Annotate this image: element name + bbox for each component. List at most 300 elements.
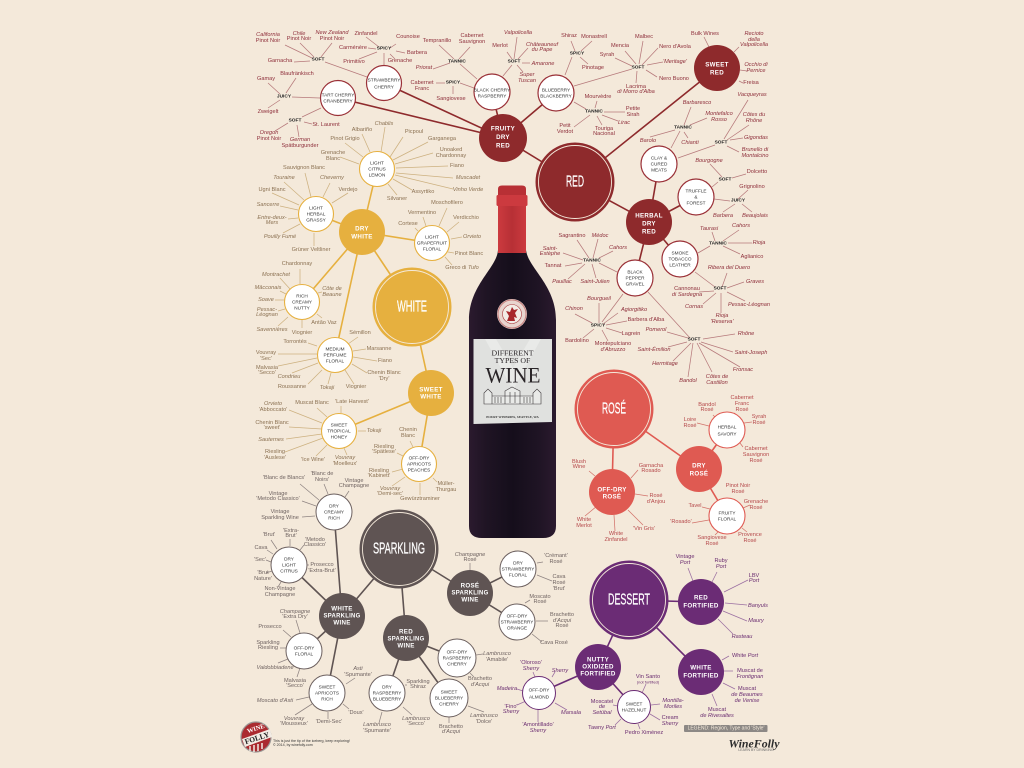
connectors: white variety leaf lines	[272, 127, 462, 495]
variety labels: rosé: Pinot Noir	[726, 483, 750, 489]
hub: fruity dry red	[479, 114, 527, 162]
taste keywords: red: SPICY	[446, 80, 461, 86]
style: dry creamy rich: RICH	[328, 516, 340, 520]
variety labels: dessert: Moscatel	[591, 699, 613, 705]
variety labels: white sparkling: Moscato d'Asti	[257, 698, 294, 704]
panel: dessert wines	[497, 554, 768, 736]
style: sweet tropical honey: HONEY	[331, 434, 348, 440]
style: light citrus lemon: CITRUS	[368, 166, 386, 172]
style: rich creamy nutty: RICH	[296, 294, 308, 298]
hub: rosé sparkling wine: SPARKLING	[452, 590, 488, 596]
variety labels: fruity dry red: Barbera	[407, 50, 428, 56]
hub: fruity dry red: DRY	[496, 134, 510, 141]
style: sweet apricots rich: SWEET	[319, 684, 335, 690]
variety labels: sweet red: Recioto	[745, 31, 763, 37]
variety labels: herbal dry red: Graves	[746, 279, 764, 285]
variety labels: dry white: Côte de	[322, 286, 342, 292]
variety labels: fruity dry red: Lacrima	[626, 84, 647, 90]
variety labels: dry white: Mâcconais	[255, 285, 282, 291]
variety labels: white sparkling: Champagne	[280, 609, 310, 615]
variety labels: rosé: Rosé	[743, 538, 757, 544]
style: off-dry raspberry cherry	[438, 639, 476, 677]
variety labels: sweet white: Riesling	[369, 468, 389, 474]
variety labels: dry white: Touraine	[273, 175, 295, 181]
variety labels: fruity dry red: Chile	[293, 31, 305, 37]
variety labels: dry white: 'Sec'	[260, 356, 272, 362]
hub: rosé sparkling wine: ROSÉ	[461, 582, 479, 590]
taste keywords: red: JUICY	[277, 94, 292, 100]
variety labels: dessert: Setúbal	[593, 710, 612, 716]
style: tart cherry cranberry	[320, 80, 356, 116]
hub: nutty oxidized fortified: FORTIFIED	[580, 670, 616, 678]
variety labels: dry white: Pinot Grigio	[330, 136, 360, 142]
style: tart cherry cranberry: CRANBERRY	[323, 98, 354, 104]
variety labels: fruity dry red: Super	[520, 72, 536, 78]
variety labels: dry white: Condrieu	[278, 374, 300, 380]
variety labels: sweet white: Muscat Blanc	[295, 400, 329, 406]
variety labels: fruity dry red: 'Meritage'	[663, 59, 688, 65]
variety labels: dry white: Montrachet	[262, 272, 290, 278]
variety labels: herbal dry red: Barbera d'Alba	[628, 317, 665, 323]
bottle medallion	[497, 299, 527, 329]
variety labels: fruity dry red: Zweigelt	[258, 109, 279, 115]
variety labels: rosé sparkling: 'Crémant'	[544, 553, 568, 559]
variety labels: fruity dry red: Sauvignon	[459, 39, 485, 45]
variety labels: herbal dry red: Brunello di	[742, 147, 769, 153]
variety labels: herbal dry red: Grignolino	[739, 184, 765, 190]
hub: red sparkling wine	[383, 615, 429, 661]
hub: sweet red	[694, 45, 740, 91]
variety labels: rosé sparkling: Brachetto	[550, 612, 574, 618]
style: black pepper gravel	[617, 260, 653, 296]
connectors: rosé variety leaf lines	[585, 413, 752, 535]
variety labels: fruity dry red: Verdot	[557, 129, 574, 135]
variety labels: dry white: Verdicchio	[453, 215, 479, 221]
bottle label	[474, 339, 552, 424]
variety labels: sweet white	[255, 399, 456, 502]
variety labels: rosé: Rosé	[752, 420, 766, 426]
hub: white fortified: WHITE	[690, 664, 712, 672]
variety labels: dessert	[497, 554, 768, 736]
style: off-dry raspberry cherry: OFF-DRY	[447, 650, 468, 654]
style: blueberry blackberry	[538, 75, 574, 111]
variety labels: dessert: Tawny Port	[588, 725, 616, 731]
variety labels: dessert: de Beaumes	[731, 692, 763, 698]
hub: red sparkling wine: SPARKLING	[388, 636, 424, 642]
hub: white sparkling wine: WINE	[333, 620, 351, 626]
style: smoke tobacco leather: LEATHER	[669, 262, 691, 268]
variety labels: herbal dry red: Gigondas	[744, 135, 768, 141]
variety labels: herbal dry red: Côtes du	[743, 112, 765, 118]
variety labels: dry white: Savennières	[256, 327, 288, 333]
variety labels: herbal dry red: Taurasi	[700, 226, 719, 232]
variety labels: herbal dry red: Médoc	[592, 233, 609, 239]
style: light grapefruit floral: GRAPEFRUIT	[417, 240, 447, 246]
variety labels: herbal dry red: 'Reserva'	[711, 319, 734, 325]
hub: SPARKLING	[360, 510, 438, 588]
style: fruity floral: FLORAL	[718, 516, 737, 522]
label chateau drawing	[484, 387, 541, 404]
variety labels: herbal dry red: Chianti	[681, 140, 699, 146]
variety labels: white sparkling: Champagne	[339, 483, 369, 489]
variety labels: fruity dry red: Valpolicella	[504, 30, 532, 36]
hub: WHITE	[372, 268, 452, 346]
variety labels: fruity dry red: Counoise	[396, 34, 420, 40]
variety labels: dry white: Mers	[266, 220, 278, 226]
variety labels: dry white: Ugni Blanc	[258, 187, 286, 193]
variety labels: sweet red: Valpolicella	[740, 42, 768, 48]
style: off-dry strawberry orange: ORANGE	[507, 626, 527, 630]
hub: herbal dry red: RED	[642, 228, 656, 236]
variety labels: fruity dry red: St. Laurent	[312, 122, 340, 128]
variety labels: fruity dry red: Tuscan	[518, 78, 536, 84]
variety labels: dry white: Blanc	[326, 156, 340, 162]
variety labels: red sparkling: Lambrusco	[483, 651, 511, 657]
variety labels: rosé: Rosé	[749, 458, 763, 464]
hub: dry white: DRY	[355, 226, 369, 232]
variety labels: dry white: Viognier	[292, 330, 312, 336]
style: dry raspberry blueberry: BLUEBERRY	[373, 696, 402, 702]
variety labels: dessert: Ruby	[714, 558, 728, 564]
variety labels: dessert: Sherry	[552, 668, 569, 674]
variety labels: herbal dry red: Hermitage	[652, 361, 678, 367]
variety labels: white sparkling: 'Doux'	[348, 710, 364, 716]
style: sweet apricots rich: APRICOTS	[315, 690, 339, 696]
variety labels: rosé: Rosé	[731, 489, 745, 495]
variety labels: rosé: White	[609, 531, 623, 537]
hub: sweet white: SWEET	[419, 386, 443, 394]
variety labels: dry white: Muscadet	[456, 175, 481, 181]
hub: off-dry rosé: ROSÉ	[603, 492, 621, 500]
hub: sweet red: SWEET	[705, 62, 729, 68]
style: tart cherry cranberry: TART CHERRY	[322, 92, 355, 98]
hub: rosé sparkling wine: WINE	[461, 596, 479, 604]
variety labels: dry white: Antão Vaz	[311, 320, 337, 326]
variety labels: sweet white: 'Late Harvest'	[335, 399, 369, 405]
taste keywords: red: SPICY	[377, 46, 392, 52]
style: sweet blueberry cherry: SWEET	[441, 690, 457, 694]
style: light grapefruit floral	[414, 226, 450, 260]
variety labels: sweet white: Gewürztraminer	[400, 496, 440, 502]
variety labels: dessert: Frontignan	[737, 674, 763, 680]
style: dry light citrus	[271, 547, 307, 583]
panel: white wines	[255, 121, 483, 502]
style: light herbal grassy	[298, 196, 334, 232]
variety labels: herbal dry red: Bardolino	[565, 338, 589, 344]
variety labels: fruity dry red: Blaufränkisch	[280, 71, 314, 77]
variety labels: dry white: Chenin Blanc	[367, 370, 401, 376]
variety labels: rosé: Rosado	[641, 468, 661, 474]
variety labels: dessert: Marsala	[561, 710, 581, 716]
variety labels: sweet white: Chenin Blanc	[255, 420, 289, 426]
variety labels: fruity dry red: Zinfandel	[354, 31, 378, 37]
variety labels: rosé: Sauvignon	[743, 452, 769, 458]
variety labels: herbal dry red: Rhône	[746, 118, 762, 124]
variety labels: herbal dry red: Pomerol	[646, 327, 667, 333]
variety labels: sweet red: Pernice	[747, 68, 765, 74]
hub: DESSERT: DESSERT	[608, 592, 650, 608]
style: black pepper gravel: BLACK	[627, 270, 644, 274]
variety labels: fruity dry red: Garnacha	[268, 58, 293, 64]
style: black cherry raspberry: BLACK CHERRY	[474, 88, 511, 92]
variety labels: herbal dry red: Cannonau	[674, 286, 700, 292]
variety labels: dry white: Unoaked	[440, 147, 462, 153]
variety labels: sweet red: Bulk Wines	[691, 31, 719, 37]
style: black cherry raspberry	[474, 74, 511, 110]
variety labels: red sparkling: Lambrusco	[470, 713, 498, 719]
hub: rosé sparkling wine	[447, 570, 493, 616]
variety labels: fruity dry red: Monastrell	[581, 34, 607, 40]
variety labels: white sparkling: Sparkling	[256, 640, 280, 646]
variety labels: dry white: Beaune	[322, 292, 342, 298]
hub: sweet white	[408, 370, 454, 416]
style: smoke tobacco leather: TOBACCO	[668, 256, 692, 262]
variety labels: rosé: White	[577, 517, 591, 523]
hub: nutty oxidized fortified: OXIDIZED	[582, 664, 614, 670]
variety labels: fruity dry red: Châteauneuf	[526, 42, 559, 48]
variety labels: fruity dry red	[256, 30, 692, 149]
label title: DIFFERENT	[491, 348, 534, 358]
style: dry creamy rich: CREAMY	[324, 510, 345, 514]
variety labels: dry white: Orvieto	[463, 234, 481, 240]
variety labels: white sparkling: Nature'	[254, 576, 272, 582]
variety labels: white sparkling: 'Spumante'	[344, 672, 372, 678]
variety labels: dessert: Montilla-	[662, 698, 684, 704]
legend: LEGEND: Region, Type and 'Style'	[688, 726, 764, 732]
variety labels: herbal dry red: Chinon	[565, 306, 583, 312]
variety labels: red sparkling: Sparkling	[406, 679, 430, 685]
variety labels: dry white: Garganega	[428, 136, 457, 142]
variety labels: herbal dry red: Montefalco	[705, 111, 733, 117]
variety labels: red sparkling: 'Secco'	[407, 721, 425, 727]
variety labels: rosé: Rosé	[700, 407, 714, 413]
variety labels: sweet white: 'Moelleux'	[333, 461, 357, 467]
variety labels: white sparkling: 'Sec'	[254, 557, 266, 563]
variety labels: rosé: Wine	[573, 464, 585, 470]
variety labels: herbal dry red: Lagrein	[622, 331, 640, 337]
variety labels: sweet white: Blanc	[401, 433, 415, 439]
bottle glass	[469, 250, 556, 538]
variety labels: fruity dry red: Carménère	[339, 45, 367, 51]
variety labels: dry white: Chardonnay	[436, 153, 466, 159]
panel: red wines	[256, 30, 770, 386]
variety labels: dry white: Moschofilero	[431, 200, 463, 206]
variety labels: dry white: Albariño	[352, 127, 372, 133]
variety labels: dessert: Rasteau	[732, 634, 752, 640]
style: off-dry raspberry cherry: CHERRY	[447, 662, 468, 666]
variety labels: fruity dry red: Amarone	[531, 61, 554, 67]
style: rich creamy nutty: NUTTY	[294, 306, 311, 310]
variety labels: dry white: Grenache	[321, 150, 345, 156]
variety labels: sweet white: 'Kabinett'	[368, 473, 390, 479]
variety labels: herbal dry red: Rosso	[711, 117, 727, 123]
variety labels: fruity dry red: Oregon	[260, 130, 278, 136]
variety labels: herbal dry red: Cahors	[609, 245, 627, 251]
style: black pepper gravel: PEPPER	[625, 276, 645, 280]
variety labels: dessert: Banyuls	[748, 603, 768, 609]
variety labels: fruity dry red: Tempranillo	[423, 38, 451, 44]
style: off-dry floral: OFF-DRY	[294, 646, 315, 650]
variety labels: rosé: Rosé	[649, 493, 663, 499]
variety labels: white sparkling: Noirs'	[315, 477, 329, 483]
variety labels: white sparkling: Classico'	[304, 542, 326, 548]
variety labels: fruity dry red: Shiraz	[561, 33, 577, 39]
variety labels: herbal dry red: Castillon	[706, 380, 728, 386]
hub: nutty oxidized fortified	[575, 644, 621, 690]
variety labels: dry white: Sémillon	[349, 330, 371, 336]
taste keywords: red	[277, 46, 746, 342]
variety labels: rosé: Blush	[572, 459, 586, 465]
style: medium perfume floral: FLORAL	[326, 358, 345, 364]
variety labels: rosé: Loire	[684, 417, 696, 423]
variety labels: dessert: White Port	[732, 653, 759, 659]
variety labels: dry white: Pinot Blanc	[455, 251, 483, 257]
style: off-dry raspberry cherry: RASPBERRY	[443, 656, 472, 660]
variety labels: fruity dry red: Mencia	[611, 43, 630, 49]
style: sweet blueberry cherry: CHERRY	[439, 702, 460, 706]
hub: white sparkling wine: WHITE	[331, 606, 353, 612]
style: medium perfume floral	[318, 338, 352, 372]
variety labels: rosé: Tavel	[688, 503, 702, 509]
variety labels: white sparkling: 'Brut'	[263, 532, 275, 538]
variety labels: dessert: Pedro Ximénez	[625, 730, 663, 736]
variety labels: white sparkling: 'Blanc de Blancs'	[263, 475, 305, 481]
variety labels: rosé: Syrah	[752, 414, 766, 420]
style: dry strawberry floral	[500, 551, 536, 587]
style: off-dry almond	[522, 676, 556, 710]
variety labels: white sparkling: Cava	[254, 545, 268, 551]
hub: DESSERT	[590, 560, 668, 640]
variety labels: dry white: Léognan	[256, 312, 278, 318]
style: sweet hazelnut	[618, 690, 650, 724]
variety labels: sweet white: 'Demi-sec'	[377, 491, 403, 497]
variety labels: herbal dry red: Saint-	[543, 246, 557, 252]
variety labels: red sparkling: 'Spumante'	[363, 728, 391, 734]
variety labels: rosé sparkling: Rosé	[552, 580, 566, 586]
panel: rosé wines	[572, 370, 769, 547]
variety labels: fruity dry red: Gamay	[257, 76, 275, 82]
variety labels: fruity dry red: Pinot Noir	[287, 36, 311, 42]
variety labels: dessert: Vintage	[676, 554, 694, 560]
style: truffle and forest: &	[694, 194, 698, 200]
logo: Wine Folly badge	[241, 722, 272, 752]
connectors: dessert family main branches	[539, 600, 701, 707]
variety labels: dry white: Chardonnay	[282, 261, 312, 267]
variety labels: dry white: Malvasia	[256, 365, 279, 371]
variety labels: dry white: Cheverny	[320, 175, 345, 181]
style: truffle and forest	[678, 179, 714, 215]
style: light herbal grassy: GRASSY	[306, 218, 327, 222]
variety labels: dessert: Port	[749, 578, 760, 584]
variety labels: dessert: 'Amontillado'	[522, 722, 554, 728]
variety labels: fruity dry red: Grenache	[388, 58, 412, 64]
variety labels: dessert: Sherry	[662, 721, 679, 727]
variety labels: sweet white: Müller-	[437, 481, 455, 487]
style: strawberry cherry: STRAWBERRY	[368, 78, 401, 82]
style: dry light citrus: CITRUS	[280, 568, 298, 574]
hub: ROSÉ	[574, 370, 654, 448]
style: dry strawberry floral: STRAWBERRY	[502, 566, 535, 572]
variety labels: rosé sparkling: Cava	[552, 574, 566, 580]
style: light grapefruit floral: LIGHT	[425, 234, 439, 240]
style: off-dry floral	[286, 633, 322, 669]
hub: white sparkling wine: SPARKLING	[324, 612, 360, 620]
variety labels: white sparkling: Non-Vintage	[264, 586, 296, 592]
variety labels: rosé sparkling: Rosé	[533, 599, 547, 605]
variety labels: dry white: Assyrtiko	[412, 189, 434, 195]
variety labels: sweet red	[691, 31, 768, 86]
variety labels: herbal dry red: Estèphe	[540, 251, 560, 257]
variety labels: dessert: Sherry	[523, 666, 540, 672]
variety labels: dry white: Tokaji	[320, 385, 335, 391]
style: light citrus lemon: LIGHT	[370, 160, 384, 166]
style: dry creamy rich	[316, 494, 352, 530]
style: herbal savory: HERBAL	[718, 424, 737, 430]
variety labels: rosé: Zinfandel	[604, 537, 628, 543]
variety labels: red sparkling: Lambrusco	[402, 716, 430, 722]
variety labels: herbal dry red: Saint-Julien	[580, 279, 610, 285]
variety labels: sweet white: Riesling	[374, 444, 394, 450]
style: medium perfume floral: PERFUME	[324, 352, 346, 358]
variety labels: herbal dry red: Montalcino	[741, 153, 769, 159]
variety labels: sweet white: 'Spätlese'	[372, 449, 396, 455]
connectors: white family main branches	[302, 169, 432, 464]
taste keywords: red: TANNIC	[448, 58, 466, 64]
variety labels: dessert: Madeira	[497, 686, 517, 692]
hub: red sparkling wine: RED	[399, 628, 413, 636]
variety labels: fruity dry red: Cabernet	[410, 80, 434, 86]
style: medium perfume floral: MEDIUM	[325, 346, 345, 352]
bottle capsule	[496, 186, 528, 253]
variety labels: rosé sparkling	[455, 552, 574, 646]
variety labels: white sparkling: 'Metodo Classico'	[256, 496, 300, 502]
style: dry raspberry blueberry: DRY	[382, 684, 393, 690]
hub: off-dry rosé	[589, 469, 635, 515]
variety labels: fruity dry red: Nacional	[593, 131, 615, 137]
variety labels: herbal dry red: Tannat	[545, 263, 562, 269]
hub: SPARKLING: SPARKLING	[373, 540, 425, 558]
style: light herbal grassy: LIGHT	[309, 206, 323, 210]
variety labels: rosé: Rosé	[735, 407, 749, 413]
style: off-dry apricots peaches: PEACHES	[408, 468, 430, 472]
variety labels: fruity dry red: Merlot	[492, 43, 508, 49]
variety labels: sweet white: Riesling	[265, 449, 285, 455]
variety labels: dry white: Vinho Verde	[453, 187, 483, 193]
variety labels: dry white: Fiano	[450, 163, 464, 169]
variety labels: red sparkling: d'Acqui	[471, 682, 490, 688]
variety labels: herbal dry red	[540, 92, 770, 386]
variety labels: sweet white: 'Ice Wine'	[301, 457, 325, 463]
variety labels: dessert: Muscat de	[737, 668, 763, 674]
variety labels: white sparkling: Valdobbiadene	[256, 665, 294, 671]
variety labels: herbal dry red: Agiorgitiko	[620, 307, 647, 313]
variety labels: red sparkling: d'Acqui	[442, 729, 461, 735]
style: herbal savory: SAVORY	[717, 432, 737, 436]
variety labels: fruity dry red: di Morro d'Alba	[617, 89, 655, 95]
taste keywords: red: TANNIC	[709, 240, 727, 246]
style: dry light citrus: LIGHT	[282, 562, 296, 568]
variety labels: sweet white: 'Abboccato'	[259, 407, 287, 413]
variety labels: fruity dry red: Primitivo	[343, 59, 365, 65]
style: strawberry cherry	[366, 66, 402, 100]
variety labels: dessert: Vin Santo	[636, 674, 660, 680]
variety labels: rosé: Bandol	[698, 402, 716, 408]
variety labels: herbal dry red: Sagrantino	[558, 233, 586, 239]
variety labels: red sparkling: Brachetto	[468, 676, 492, 682]
connectors: red family main branches	[338, 68, 717, 278]
connectors: rosé family main branches	[612, 409, 727, 516]
variety labels: herbal dry red: Rioja	[716, 313, 728, 319]
